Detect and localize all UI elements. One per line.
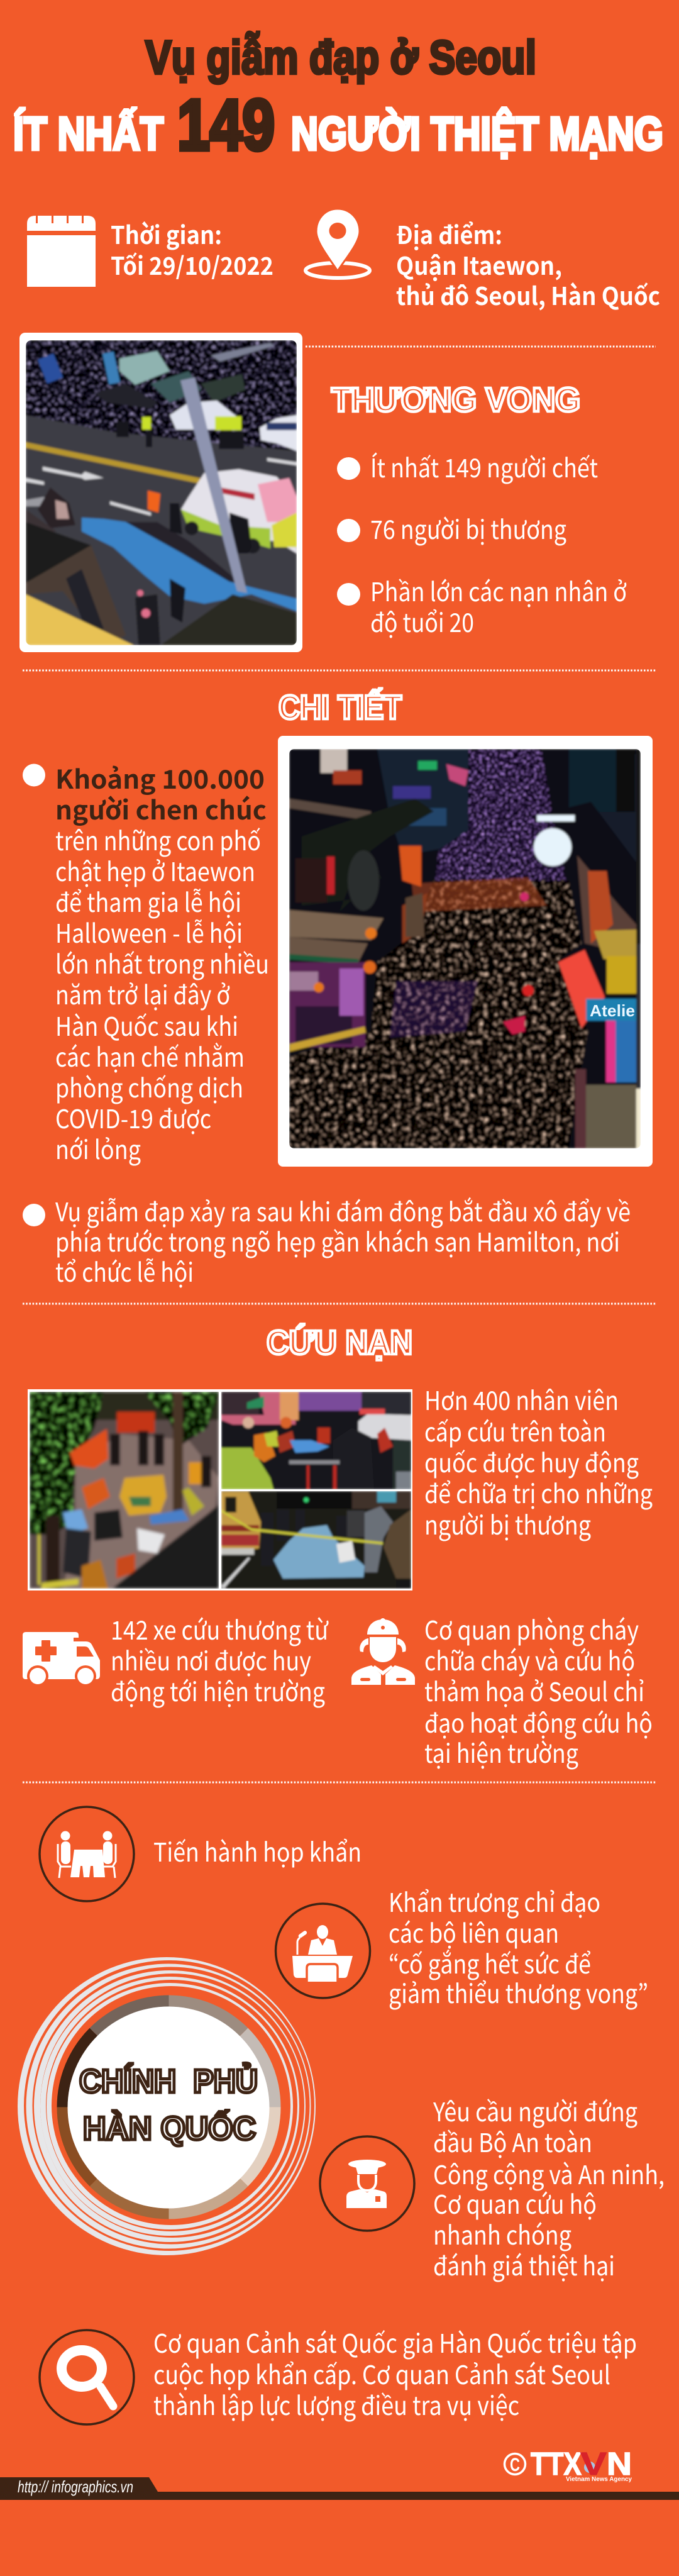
icon: firefighter bbox=[351, 1618, 415, 1685]
location text bbox=[396, 216, 660, 313]
footer bar bbox=[0, 2477, 679, 2500]
casualties list: độ tuổi 20 bbox=[370, 602, 474, 640]
casualties list bbox=[337, 447, 627, 640]
ambulance text: 142 xe cứu thương từ bbox=[111, 1609, 329, 1647]
icon: ambulance bbox=[23, 1632, 100, 1687]
details text: lớn nhất trong nhiều bbox=[55, 943, 269, 981]
ambulance text: nhiều nơi được huy bbox=[111, 1640, 311, 1678]
police text: thành lập lực lượng điều tra vụ việc bbox=[153, 2385, 519, 2423]
title line 2: 149 bbox=[177, 86, 275, 165]
directive text bbox=[389, 1882, 648, 2011]
directive text: Khẩn trương chỉ đạo bbox=[389, 1882, 600, 1919]
icon: meeting bbox=[40, 1807, 134, 1901]
concentric crescent rings bbox=[18, 1957, 316, 2255]
rescue text 1: quốc được huy động bbox=[424, 1442, 639, 1480]
details text: người chen chúc bbox=[55, 789, 267, 827]
fire agency text: đạo hoạt động cứu hộ bbox=[424, 1702, 653, 1740]
location text: Quận Itaewon, bbox=[396, 247, 562, 282]
dotted divider bbox=[23, 1303, 656, 1304]
details text: nới lỏng bbox=[55, 1129, 141, 1167]
details text: Khoảng 100.000 bbox=[55, 758, 265, 796]
logo: TTXVN: Vietnam News Agency bbox=[566, 2476, 632, 2483]
fire agency text bbox=[424, 1609, 653, 1770]
location text: Địa điểm: bbox=[396, 216, 502, 252]
title bbox=[13, 31, 663, 165]
title line 1: Vụ giẫm đạp ở Seoul bbox=[145, 31, 536, 84]
photo: covered victims bbox=[221, 1491, 411, 1589]
icon: speaker at podium bbox=[275, 1904, 370, 1998]
title line 2 bbox=[13, 86, 663, 165]
dotted divider top bbox=[306, 346, 656, 347]
details text: Hàn Quốc sau khi bbox=[55, 1006, 238, 1043]
details text: chật hẹp ở Itaewon bbox=[55, 851, 255, 889]
details text: để tham gia lễ hội bbox=[55, 882, 241, 919]
logo: TTXVN: N bbox=[607, 2446, 632, 2482]
rescue text 1: cấp cứu trên toàn bbox=[424, 1411, 606, 1449]
time text bbox=[111, 216, 273, 282]
photo: crowd in Itaewon alley: Atelie bbox=[590, 1001, 635, 1020]
rescue text 1: Hơn 400 nhân viên bbox=[424, 1380, 619, 1418]
casualties list: 76 người bị thương bbox=[370, 509, 566, 547]
police text bbox=[153, 2323, 637, 2423]
casualties list: Phần lớn các nạn nhân ở bbox=[370, 571, 627, 609]
rescue text 1: người bị thương bbox=[424, 1504, 591, 1542]
request text: đánh giá thiệt hại bbox=[433, 2245, 615, 2283]
rescue text 1: để chữa trị cho những bbox=[424, 1473, 653, 1511]
ambulance text: động tới hiện trường bbox=[111, 1671, 325, 1709]
heading: details: CHI TIẾT bbox=[279, 689, 402, 726]
request text: đầu Bộ An toàn bbox=[433, 2122, 592, 2160]
request text: Yêu cầu người đứng bbox=[433, 2091, 638, 2129]
casualties list: Ít nhất 149 người chết bbox=[370, 447, 598, 485]
request text: nhanh chóng bbox=[433, 2214, 571, 2252]
fire agency text: tại hiện trường bbox=[424, 1733, 578, 1770]
time text: Tối 29/10/2022 bbox=[111, 247, 273, 282]
meeting text: Tiến hành họp khẩn bbox=[153, 1831, 362, 1869]
rescue text 1 bbox=[424, 1380, 653, 1542]
title line 2: ÍT NHẤT bbox=[13, 108, 163, 160]
details text: các hạn chế nhằm bbox=[55, 1036, 245, 1074]
center label: HÀN QUỐC bbox=[83, 2110, 256, 2147]
heading: rescue: CỨU NẠN bbox=[267, 1324, 412, 1362]
footer url: http:// infographics.vn bbox=[18, 2477, 133, 2496]
segmented ring bbox=[57, 1995, 280, 2219]
police text: cuộc họp khẩn cấp. Cơ quan Cảnh sát Seoul bbox=[153, 2354, 610, 2392]
logo: TTXVN bbox=[504, 2446, 632, 2483]
icon: location pin bbox=[306, 209, 370, 278]
heading: casualties: THƯƠNG VONG bbox=[331, 381, 580, 419]
directive text: giảm thiểu thương vong” bbox=[389, 1973, 648, 2011]
icon: calendar bbox=[27, 216, 96, 287]
photo: street scene bbox=[30, 1392, 219, 1589]
details text 2 bbox=[23, 1191, 631, 1289]
photo collage: rescue scenes bbox=[28, 1389, 412, 1591]
icon: magnifying glass bbox=[40, 2330, 134, 2424]
time text: Thời gian: bbox=[111, 216, 222, 252]
center label: CHÍNH PHỦ bbox=[79, 2063, 258, 2100]
directive text: các bộ liên quan bbox=[389, 1913, 559, 1950]
details text: năm trở lại đây ở bbox=[55, 974, 230, 1012]
center label bbox=[79, 2063, 258, 2147]
details text bbox=[23, 758, 269, 1167]
logo: TTXVN: C bbox=[510, 2455, 520, 2475]
request text: Cơ quan cứu hộ bbox=[433, 2184, 597, 2221]
photo: stretcher bbox=[221, 1392, 411, 1489]
directive text: “cố gắng hết sức để bbox=[389, 1943, 591, 1981]
location text: thủ đô Seoul, Hàn Quốc bbox=[396, 277, 660, 313]
fire agency text: chữa cháy và cứu hộ bbox=[424, 1640, 635, 1678]
fire agency text: Cơ quan phòng cháy bbox=[424, 1609, 639, 1647]
photo: ambulance and victims on the street bbox=[19, 333, 302, 652]
dotted divider bbox=[23, 1781, 656, 1784]
details text: Halloween - lễ hội bbox=[55, 913, 243, 950]
government circle bbox=[18, 1957, 316, 2255]
photo: crowd in Itaewon alley bbox=[278, 736, 653, 1167]
fire agency text: thảm họa ở Seoul chỉ bbox=[424, 1671, 644, 1709]
ambulance text bbox=[111, 1609, 329, 1709]
details text: trên những con phố bbox=[55, 820, 261, 858]
request text bbox=[433, 2091, 665, 2283]
details text: COVID-19 được bbox=[55, 1098, 211, 1136]
logo: TTXVN: V bbox=[580, 2446, 607, 2482]
details text 2: tổ chức lễ hội bbox=[55, 1252, 194, 1289]
details text: phòng chống dịch bbox=[55, 1067, 243, 1105]
dotted divider bbox=[23, 669, 656, 672]
icon: police officer bbox=[320, 2136, 414, 2231]
logo: TTXVN: TTX bbox=[531, 2446, 582, 2482]
